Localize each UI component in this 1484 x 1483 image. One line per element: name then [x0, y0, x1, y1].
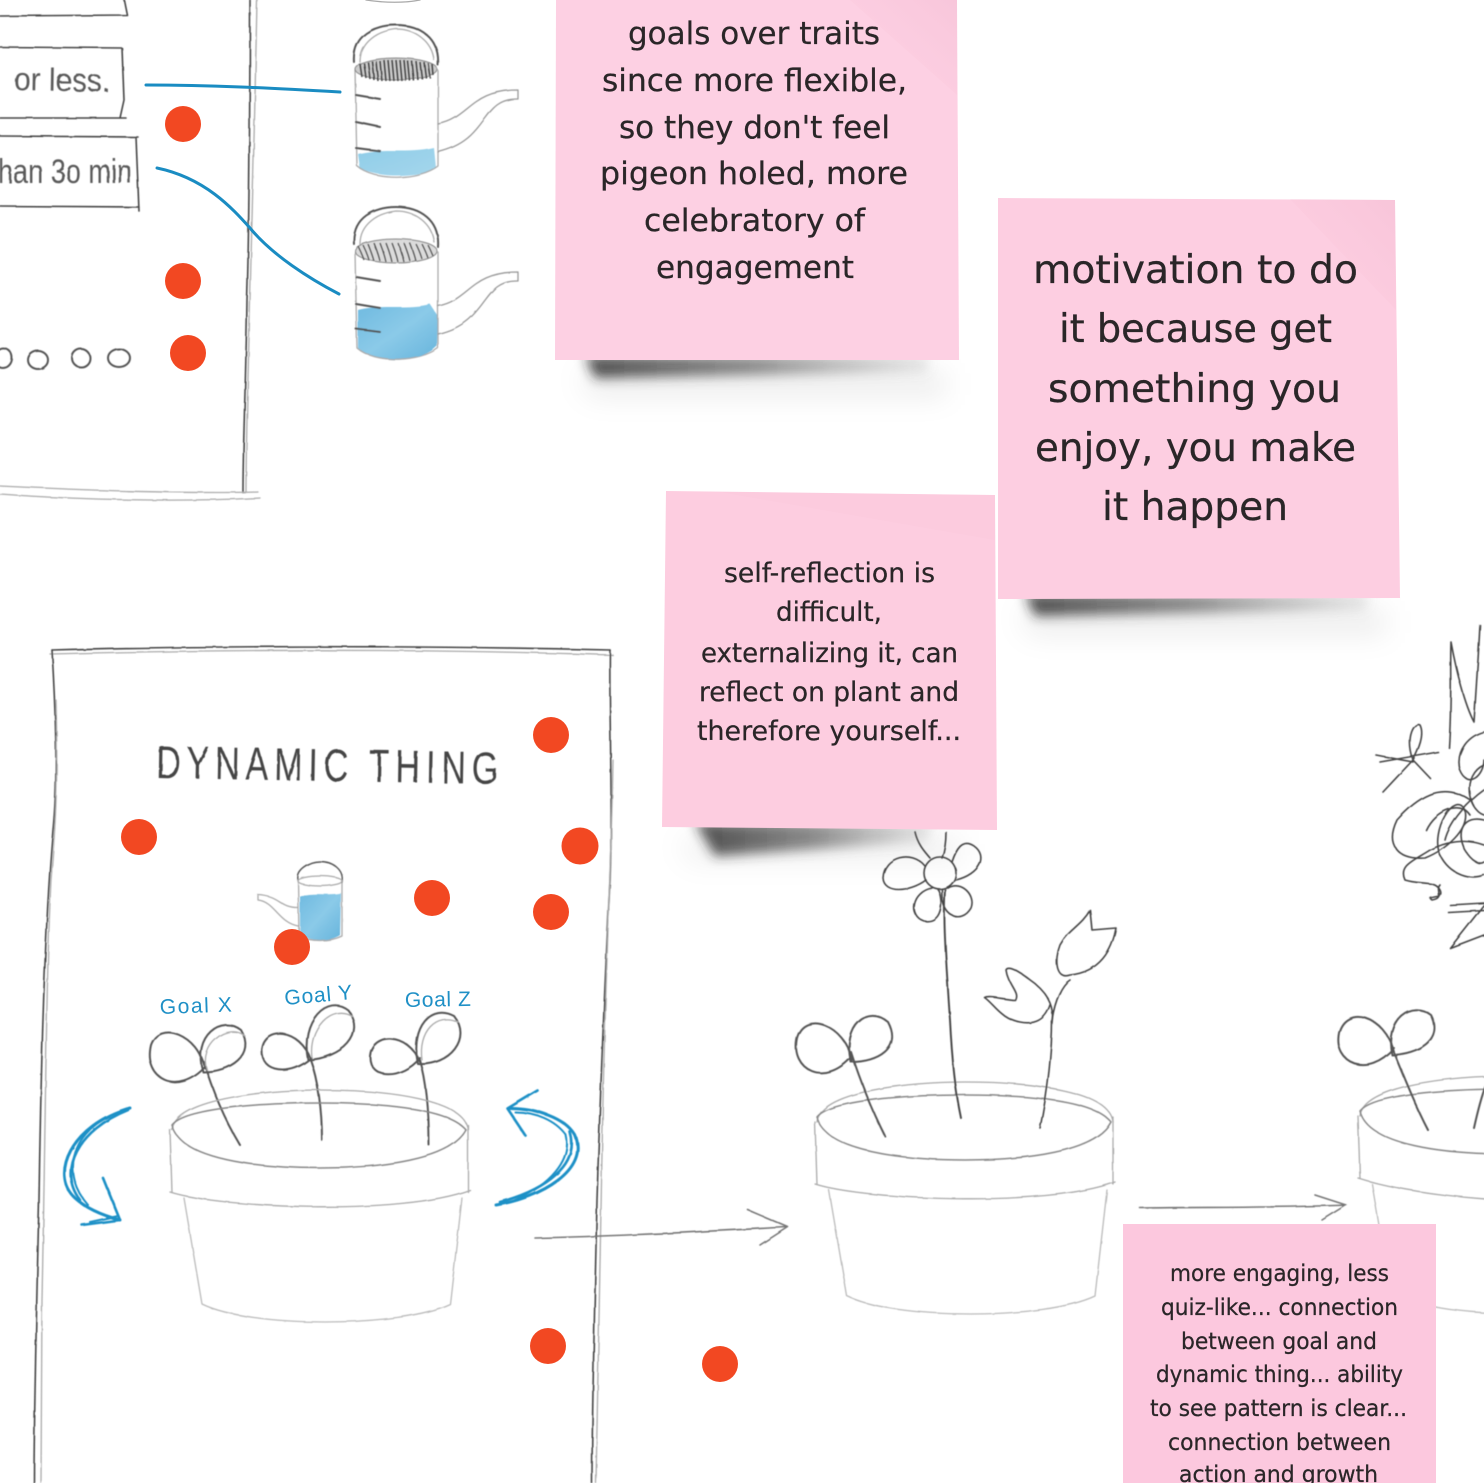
small can fragment at top [366, 0, 420, 2]
red voting dots [121, 106, 738, 1382]
seedlings: goals x y z [150, 1005, 460, 1145]
sticky note: self-reflection [662, 491, 997, 860]
sticky note: goals over traits: since more flexible, [602, 63, 907, 99]
sticky note: goals over traits [555, 0, 959, 396]
pot: second with flowers [796, 832, 1116, 1314]
goal labels: Goal Y [283, 981, 353, 1010]
sticky note: goals over traits: goals over traits [628, 16, 880, 52]
pot: first [170, 1090, 470, 1322]
sticky note: motivation: it happen [1102, 485, 1288, 530]
arrow: rotate left [64, 1108, 130, 1225]
arrow: dynamic thing to next state [535, 1210, 788, 1245]
sticky note: more engaging: to see pattern is clear... [1150, 1396, 1407, 1422]
wireframe panel: top left [0, 0, 260, 500]
pot: third [1338, 1010, 1484, 1314]
arrow: rotate right [496, 1090, 578, 1205]
sticky note: self-reflection: reflect on plant and [699, 677, 959, 708]
sticky note: self-reflection: therefore yourself... [697, 716, 961, 747]
tulips [985, 910, 1116, 1128]
title: dynamic thing: DYNAMIC THING [156, 736, 499, 794]
sticky note: goals over traits: so they don't feel [619, 110, 890, 146]
connector lines to watering cans [146, 85, 340, 294]
sticky note: more engaging: more engaging, less [1170, 1261, 1389, 1287]
sticky note: self-reflection: self-reflection is [724, 558, 935, 589]
sticky note: motivation [998, 198, 1400, 634]
sticky note: goals over traits: engagement [656, 250, 854, 286]
sticky note: more engaging: connection between [1168, 1430, 1391, 1456]
sticky note: goals over traits: celebratory of [644, 203, 866, 239]
arrow: second to third state [1140, 1195, 1346, 1220]
sticky note: self-reflection: difficult, [776, 597, 882, 628]
sticky note: motivation: it because get [1059, 307, 1332, 352]
panel frame: dynamic thing [34, 647, 613, 1483]
seedling in third pot [1338, 1010, 1484, 1130]
daisy flower [883, 832, 981, 1118]
handwritten option: or less: or less. [14, 61, 110, 99]
goal labels: Goal Z [405, 988, 471, 1012]
sticky note: more engaging: dynamic thing... ability [1156, 1362, 1403, 1388]
sticky note: motivation: enjoy, you make [1035, 426, 1356, 471]
answer scale circles [0, 348, 130, 369]
seedling in second pot [796, 1016, 892, 1136]
handwritten option: than 30 min: han 3o min [0, 153, 132, 191]
goal labels: Goal X [159, 993, 232, 1019]
icon: small watering can [258, 862, 342, 940]
icon: watering can more water [354, 207, 518, 360]
sticky note: motivation: something you [1048, 367, 1341, 412]
sticky note: motivation: motivation to do [1033, 248, 1358, 293]
sticky note: more engaging [1123, 1224, 1436, 1483]
scribble plant [1376, 625, 1484, 948]
sticky note: goals over traits: pigeon holed, more [600, 156, 908, 192]
sticky note: self-reflection: externalizing it, can [701, 638, 958, 669]
goal labels [159, 981, 471, 1019]
sticky note: more engaging: between goal and [1181, 1329, 1377, 1355]
icon: watering can low water [354, 25, 518, 177]
sticky note: more engaging: quiz-like... connection [1161, 1295, 1398, 1321]
